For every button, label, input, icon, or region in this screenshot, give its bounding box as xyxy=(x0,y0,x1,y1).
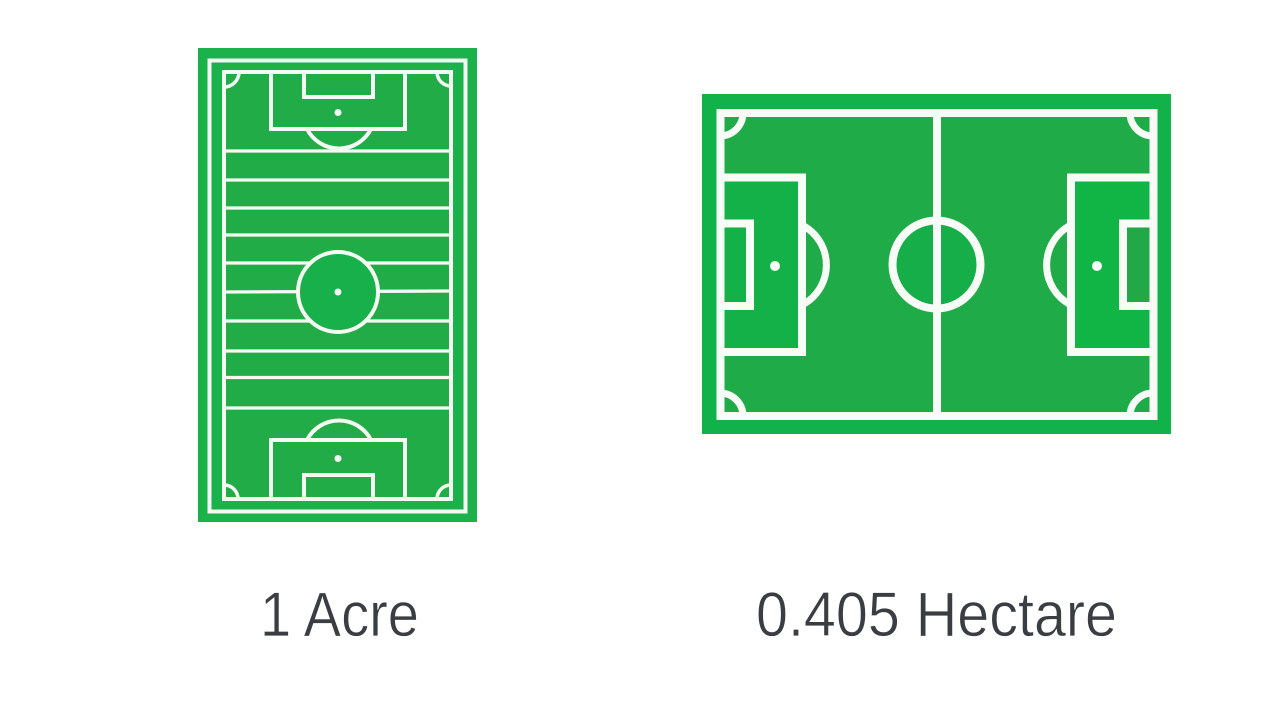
touchline: horizontal xyxy=(720,113,1154,416)
center circle: vertical xyxy=(298,252,378,332)
left goal box xyxy=(720,224,750,306)
left penalty arc xyxy=(802,225,826,305)
center circle: horizontal xyxy=(892,220,980,308)
halfway line xyxy=(933,113,941,416)
right penalty arc xyxy=(1047,225,1071,305)
right goal box xyxy=(1123,224,1153,306)
right goal box fill xyxy=(1123,224,1150,306)
inner touchline xyxy=(224,72,451,499)
top penalty spot xyxy=(334,109,342,116)
horizontal stripes xyxy=(224,151,451,408)
inner turf: horizontal xyxy=(720,113,1153,416)
top goal box xyxy=(304,72,373,97)
bottom penalty area xyxy=(271,440,405,499)
left penalty fill xyxy=(723,180,802,349)
bottom goal box xyxy=(304,475,373,499)
right penalty fill xyxy=(1071,180,1150,349)
left penalty area xyxy=(720,178,802,352)
left penalty spot xyxy=(770,261,780,271)
top penalty area xyxy=(271,72,405,129)
corner arcs: horizontal xyxy=(720,113,1153,416)
panel: vertical pitch, 1 acre xyxy=(198,48,477,522)
pitch surface: horizontal xyxy=(702,94,1171,434)
bottom penalty spot xyxy=(334,455,342,462)
panel: horizontal pitch, 0.405 hectare xyxy=(702,94,1171,434)
label: 1 acre: 1 Acre xyxy=(260,580,419,650)
center spot: vertical xyxy=(334,288,342,296)
inner turf: vertical xyxy=(224,72,451,499)
top penalty arc xyxy=(307,129,371,149)
right penalty spot xyxy=(1092,261,1102,271)
label: 0.405 hectare: 0.405 Hectare xyxy=(756,580,1117,650)
right penalty area xyxy=(1071,178,1153,352)
outer boundary line xyxy=(210,60,466,512)
bottom penalty arc xyxy=(307,420,371,440)
corner arcs: vertical xyxy=(224,72,451,499)
pitch surface: vertical xyxy=(198,48,477,522)
